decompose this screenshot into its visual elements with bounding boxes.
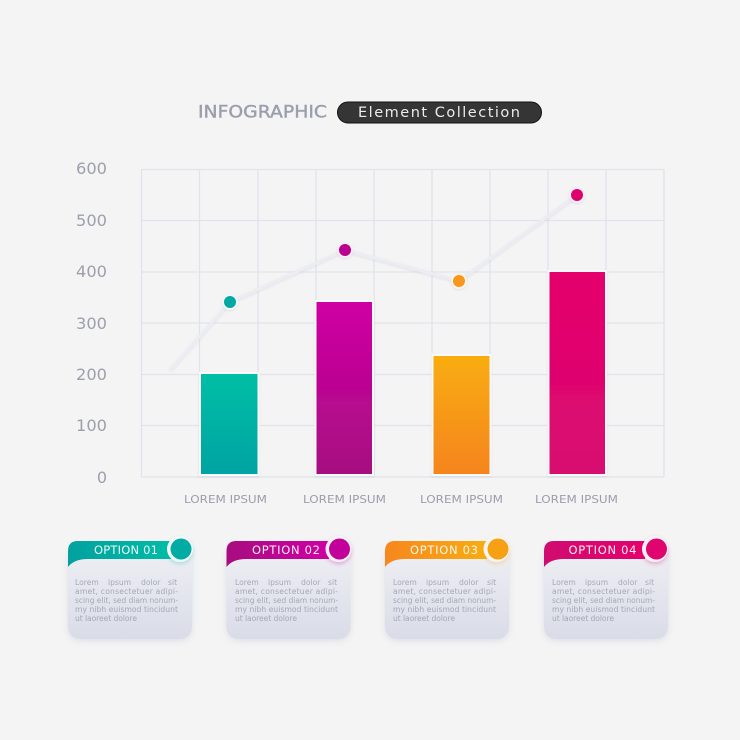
panel: option 01: sit: [168, 578, 177, 587]
title: [198, 102, 542, 123]
bar 3: [432, 355, 490, 475]
panel: option 04: sit: [645, 578, 654, 587]
panel: option 02: OPTION 02: [252, 543, 320, 557]
y axis labels: [76, 159, 107, 487]
bar 2: [316, 301, 373, 475]
panel: option 02: ut laoreet dolore: [235, 614, 297, 623]
point 3: [452, 274, 466, 288]
panel: option 04: OPTION 04: [568, 543, 636, 557]
panel: option 01: amet, consectetuer adipi-: [75, 587, 178, 596]
point 1: [223, 295, 237, 309]
x axis labels: [184, 494, 618, 506]
panel: option 03: Lorem: [393, 578, 417, 587]
panel: option 02: dolor: [301, 578, 321, 587]
subtitle pill: Element Collection: [358, 105, 520, 121]
panel: option 01: ut laoreet dolore: [75, 614, 137, 623]
panel: option 03: ipsum: [426, 578, 449, 587]
panel: option 04: dolor: [618, 578, 638, 587]
panel: option 04: ut laoreet dolore: [552, 614, 614, 623]
panel: option 01: dolor: [141, 578, 161, 587]
panel: option 03: ut laoreet dolore: [393, 614, 455, 623]
x axis labels: LOREM IPSUM: [184, 494, 267, 506]
y axis labels: 500: [76, 211, 107, 230]
panel: option 03: sit: [487, 578, 496, 587]
trend line: [171, 195, 577, 369]
panel: option 01: Lorem: [75, 578, 99, 587]
panel: option 04: my nibh euismod tincidunt: [552, 605, 655, 614]
panel: option 03: OPTION 03: [410, 543, 478, 557]
y axis labels: 300: [76, 314, 107, 333]
panel: option 02: scing elit, sed diam nonum-: [235, 596, 338, 605]
line chart: [171, 188, 584, 369]
panel: option 01: OPTION 01: [94, 543, 158, 557]
panel: option 01: [68, 536, 193, 639]
panel: option 04: ipsum: [585, 578, 608, 587]
panel: option 03: my nibh euismod tincidunt: [393, 605, 496, 614]
y axis labels: 100: [76, 416, 107, 435]
point 2: [338, 243, 352, 257]
panel: option 03: [385, 536, 510, 639]
panel: option 01: ipsum: [108, 578, 131, 587]
panel: option 02: sit: [328, 578, 337, 587]
panel: option 04: Lorem: [552, 578, 576, 587]
panel: option 03: amet, consectetuer adipi-: [393, 587, 496, 596]
panel: option 04: [544, 536, 668, 639]
panel: option 03: dolor: [459, 578, 479, 587]
panel: option 02: my nibh euismod tincidunt: [235, 605, 338, 614]
x axis labels: LOREM IPSUM: [303, 494, 386, 506]
bar 1: [200, 373, 258, 475]
subtitle pill: [338, 102, 542, 123]
x axis labels: LOREM IPSUM: [420, 494, 503, 506]
y axis labels: 0: [97, 468, 107, 487]
bar chart: [200, 271, 606, 475]
y axis labels: 600: [76, 159, 107, 178]
panel: option 04: amet, consectetuer adipi-: [552, 587, 655, 596]
panel: option 03: scing elit, sed diam nonum-: [393, 596, 496, 605]
y axis labels: 400: [76, 262, 107, 281]
y axis labels: 200: [76, 365, 107, 384]
title word: INFOGRAPHIC: [198, 102, 327, 122]
panel: option 02: ipsum: [268, 578, 291, 587]
x axis labels: LOREM IPSUM: [535, 494, 618, 506]
panel: option 02: Lorem: [235, 578, 259, 587]
panel: option 01: my nibh euismod tincidunt: [75, 605, 178, 614]
point 4: [570, 188, 584, 202]
chart grid: [141, 169, 664, 477]
panel: option 04: scing elit, sed diam nonum-: [552, 596, 655, 605]
bar 4: [548, 271, 606, 475]
panel: option 01: scing elit, sed diam nonum-: [75, 596, 178, 605]
panel: option 02: amet, consectetuer adipi-: [235, 587, 338, 596]
panel: option 02: [226, 536, 352, 639]
